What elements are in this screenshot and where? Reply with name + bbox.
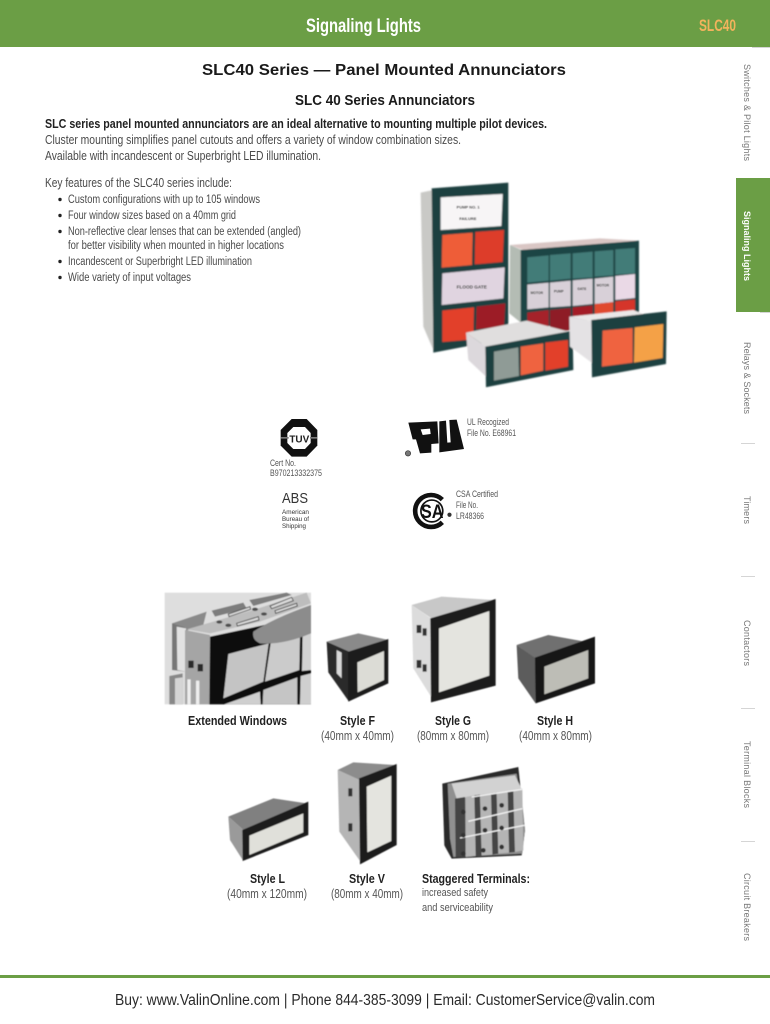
labels: top row of styles: Extended Windows (188, 714, 287, 728)
photo: Style H (517, 635, 595, 703)
intro text: Available with incandescent or Superbright LED illumination. (45, 148, 321, 163)
photo: Style V (338, 762, 397, 864)
CSA file text (456, 489, 498, 521)
certification: ABS: American (282, 509, 309, 516)
header band (0, 0, 770, 47)
product photo: annunciator panels: PUMP NO. 1 (457, 204, 480, 209)
product photo: annunciator panels: MOTOR (597, 284, 610, 288)
labels: top row of styles: (40mm x 40mm) (321, 729, 394, 743)
certification: ABS: Bureau of (282, 516, 309, 523)
key features list: for better visibility when mounted in higher locations (68, 240, 284, 252)
photo: extended windows (165, 593, 311, 704)
product photo: annunciator panels: MOTOR (531, 291, 544, 295)
photo: staggered terminals (442, 767, 525, 859)
certification: TUV logo (281, 419, 317, 457)
UL file text: UL Recogized (467, 417, 509, 427)
certification: CSA logo: SA (421, 502, 444, 523)
CSA file text: LR48366 (456, 511, 484, 521)
key features list: Custom configurations with up to 105 windows (68, 194, 260, 206)
CSA file text: File No. (456, 500, 478, 510)
product photo: annunciator panels: GATE (577, 287, 587, 291)
sidebar tabs: Relays & Sockets (742, 342, 752, 414)
labels: top row of styles: Style H (537, 714, 573, 728)
certification: ABS: ABS (282, 490, 308, 507)
labels: bottom row of styles: increased safety (422, 887, 488, 899)
product photo: annunciator panels: PUMP (554, 290, 564, 294)
labels: bottom row of styles: Staggered Terminals: (422, 872, 530, 886)
TUV certificate number (270, 458, 322, 478)
key features list (45, 175, 301, 284)
labels: top row of styles (188, 714, 592, 743)
labels: bottom row of styles: Style L (250, 872, 285, 886)
intro text (45, 116, 547, 163)
labels: bottom row of styles (227, 872, 530, 914)
TUV certificate number: Cert No. (270, 458, 296, 468)
footer rule (0, 975, 770, 978)
product photo: annunciator panels (421, 183, 667, 387)
subtitle: SLC 40 Series Annunciators (295, 92, 475, 109)
labels: top row of styles: (80mm x 80mm) (417, 729, 489, 743)
labels: bottom row of styles: (40mm x 120mm) (227, 887, 307, 901)
key features list: Four window sizes based on a 40mm grid (68, 210, 236, 222)
certification: UL logo (405, 420, 464, 456)
active tab: Signaling Lights: Signaling Lights (741, 211, 752, 281)
UL file text (467, 417, 516, 438)
product photo: annunciator panels: FLOOD GATE (457, 285, 487, 290)
key features list: Incandescent or Superbright LED illumination (68, 256, 252, 268)
labels: top row of styles: Style F (340, 714, 375, 728)
intro text: SLC series panel mounted annunciators are an ideal alternative to mounting multiple pilot devices. (45, 116, 547, 131)
labels: bottom row of styles: Style V (349, 872, 386, 886)
CSA file text: CSA Certified (456, 489, 498, 499)
key features list: Non-reflective clear lenses that can be extended (angled) (68, 226, 301, 238)
labels: bottom row of styles: and serviceability (422, 902, 493, 914)
sidebar tabs: Circuit Breakers (742, 873, 752, 942)
photo: Style G (412, 597, 496, 702)
certification: ABS: Shipping (282, 523, 306, 530)
footer contact line: Buy: www.ValinOnline.com | Phone 844-385-3099 | Email: CustomerService@valin.com (115, 992, 655, 1009)
TUV certificate number: B970213332375 (270, 468, 322, 478)
photo: Style F (327, 633, 388, 702)
key features list: Key features of the SLC40 series include: (45, 175, 232, 190)
labels: top row of styles: Style G (435, 714, 471, 728)
header title: Signaling Lights (306, 16, 421, 37)
key features list: Wide variety of input voltages (68, 272, 191, 284)
intro text: Cluster mounting simplifies panel cutouts and offers a variety of window combination sizes. (45, 132, 461, 147)
certification: ABS (282, 490, 309, 530)
labels: top row of styles: (40mm x 80mm) (519, 729, 592, 743)
labels: bottom row of styles: (80mm x 40mm) (331, 887, 403, 901)
sidebar tabs: Terminal Blocks (742, 741, 752, 808)
sidebar tabs (736, 47, 770, 942)
photo: Style L (228, 798, 308, 861)
certification: CSA logo (415, 495, 452, 527)
sidebar tabs: Contactors (742, 620, 752, 666)
product photo: annunciator panels: FAILURE (459, 216, 477, 221)
UL file text: File No. E68961 (467, 428, 516, 438)
page title: SLC40 Series — Panel Mounted Annunciators (202, 62, 566, 79)
sidebar tabs: Switches & Pilot Lights (742, 64, 752, 162)
certification: TUV logo: TUV (289, 434, 310, 445)
sidebar tabs: Timers (742, 496, 752, 524)
header section code: SLC40 (699, 16, 736, 35)
active tab: Signaling Lights (736, 178, 770, 312)
